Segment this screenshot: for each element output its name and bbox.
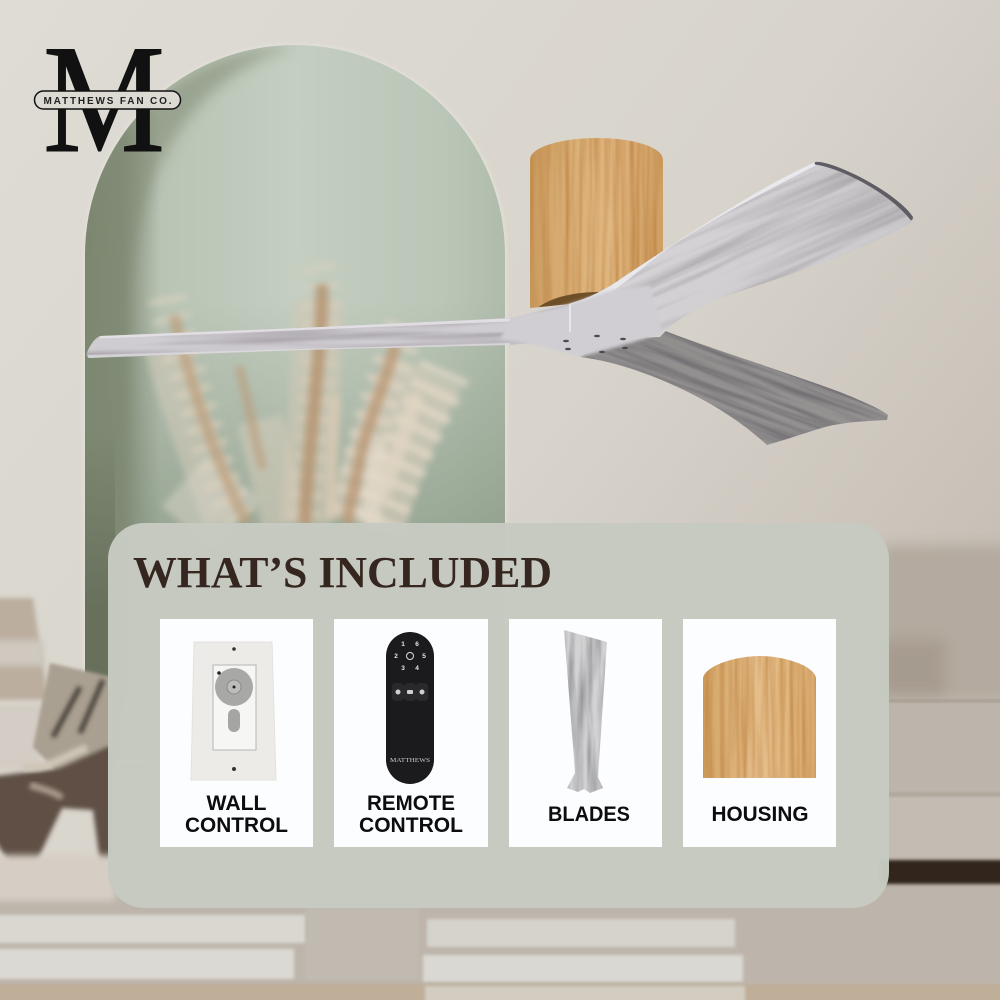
arched niche — [84, 45, 506, 678]
icon: remote: 4 — [415, 665, 419, 672]
icon: remote: MATTHEWS — [390, 757, 430, 764]
floor — [0, 855, 1000, 1000]
fan hub with screws — [500, 285, 662, 357]
pampas grass — [165, 265, 445, 525]
card background — [683, 619, 836, 847]
card: housing — [683, 619, 836, 847]
label: WALL — [206, 791, 266, 815]
card background — [334, 619, 488, 847]
fan blade: upper right — [568, 162, 913, 338]
label: BLADES — [548, 802, 630, 826]
fan blade: long left — [86, 304, 568, 358]
icon: remote — [386, 632, 434, 784]
icon: blade — [564, 630, 607, 793]
label line two: CONTROL — [185, 813, 288, 837]
label: HOUSING — [712, 802, 808, 826]
fan housing — [530, 138, 663, 315]
icon: remote: 1 — [401, 641, 405, 648]
icon: remote: 6 — [415, 641, 419, 648]
icon: remote: 5 — [422, 653, 426, 660]
card: wall control — [160, 619, 313, 847]
panel: what's included — [108, 523, 889, 908]
left sofa and throw — [0, 598, 112, 890]
logo monogram M: M — [43, 13, 165, 185]
icon: remote: 2 — [394, 653, 398, 660]
icon: wall control — [191, 642, 276, 780]
card background — [509, 619, 662, 847]
ceiling fan — [86, 138, 913, 445]
heading: WHAT’S INCLUDED — [133, 548, 552, 597]
right sofa — [880, 545, 1000, 859]
panel background — [108, 523, 889, 908]
logo: Matthews Fan Co. — [34, 13, 180, 185]
icon: housing — [703, 656, 816, 778]
card: blades — [509, 619, 662, 847]
icon: remote: 3 — [401, 665, 405, 672]
label line two: CONTROL — [359, 813, 463, 837]
card: remote control — [334, 619, 488, 847]
card background — [160, 619, 313, 847]
logo pill label: MATTHEWS FAN CO. — [44, 96, 172, 107]
fan blade: lower right — [580, 331, 888, 445]
label: REMOTE — [367, 791, 455, 815]
logo pill label — [34, 91, 180, 109]
